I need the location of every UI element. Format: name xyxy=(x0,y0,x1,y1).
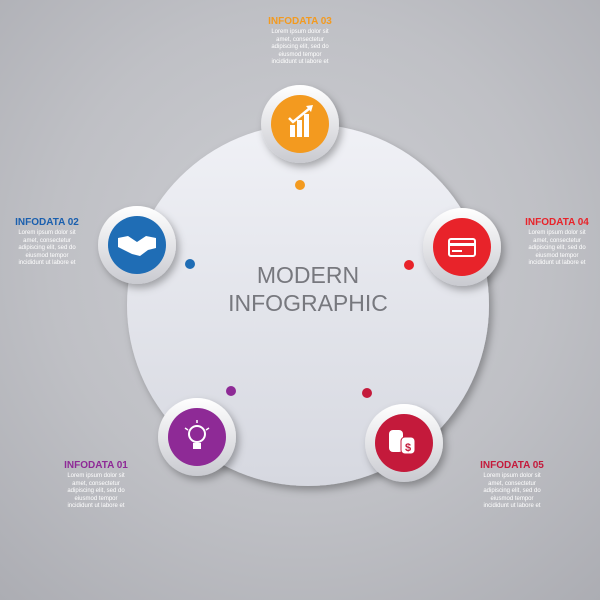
text: infodata 04: amet, consectetur xyxy=(533,238,581,244)
icon: chart orange xyxy=(261,85,339,163)
center title: MODERN xyxy=(257,262,359,288)
text: infodata 04: incididunt ut labore et xyxy=(528,260,586,266)
icon: coins crimson: $ xyxy=(405,442,411,454)
text: infodata 01: INFODATA 01 xyxy=(64,460,128,471)
text: infodata 01: adipiscing elit, sed do xyxy=(67,488,125,494)
text: infodata 03: eiusmod tempor xyxy=(278,52,322,58)
dots xyxy=(185,180,414,398)
text: infodata 05: INFODATA 05 xyxy=(480,460,544,471)
text: infodata 05: Lorem ipsum dolor sit xyxy=(483,473,541,479)
text: infodata 01: Lorem ipsum dolor sit xyxy=(67,473,125,479)
text: infodata 02: incididunt ut labore et xyxy=(18,260,76,266)
text: infodata 04: INFODATA 04 xyxy=(525,217,589,228)
text: infodata 05: adipiscing elit, sed do xyxy=(483,488,541,494)
text: infodata 03: incididunt ut labore et xyxy=(271,59,329,65)
text: infodata 04 xyxy=(525,217,589,266)
text: infodata 02: Lorem ipsum dolor sit xyxy=(18,230,76,236)
center disc: INFOGRAPHIC xyxy=(228,290,388,316)
text: infodata 05 xyxy=(480,460,544,509)
text: infodata 01: eiusmod tempor xyxy=(74,496,118,502)
text: infodata 03: adipiscing elit, sed do xyxy=(271,44,329,50)
icon: coins crimson xyxy=(365,404,443,482)
text: infodata 01: incididunt ut labore et xyxy=(67,503,125,509)
text: infodata 02: amet, consectetur xyxy=(23,238,71,244)
text: infodata 01 xyxy=(64,460,128,509)
text: infodata 03: amet, consectetur xyxy=(276,37,324,43)
text: infodata 02: eiusmod tempor xyxy=(25,253,69,259)
icon: bulb purple xyxy=(158,398,236,476)
text: infodata 04: Lorem ipsum dolor sit xyxy=(528,230,586,236)
text: infodata 03: Lorem ipsum dolor sit xyxy=(271,29,329,35)
icon: handshake blue xyxy=(98,206,176,284)
text: infodata 05: incididunt ut labore et xyxy=(483,503,541,509)
text: infodata 02 xyxy=(15,217,79,266)
text: infodata 04: eiusmod tempor xyxy=(535,253,579,259)
text: infodata 01: amet, consectetur xyxy=(72,481,120,487)
text: infodata 03 xyxy=(268,16,332,65)
text: infodata 02: INFODATA 02 xyxy=(15,217,79,228)
text: infodata 05: eiusmod tempor xyxy=(490,496,534,502)
text: infodata 05: amet, consectetur xyxy=(488,481,536,487)
icon: card red xyxy=(423,208,501,286)
center disc xyxy=(127,124,489,486)
text: infodata 02: adipiscing elit, sed do xyxy=(18,245,76,251)
text: infodata 03: INFODATA 03 xyxy=(268,16,332,27)
text: infodata 04: adipiscing elit, sed do xyxy=(528,245,586,251)
